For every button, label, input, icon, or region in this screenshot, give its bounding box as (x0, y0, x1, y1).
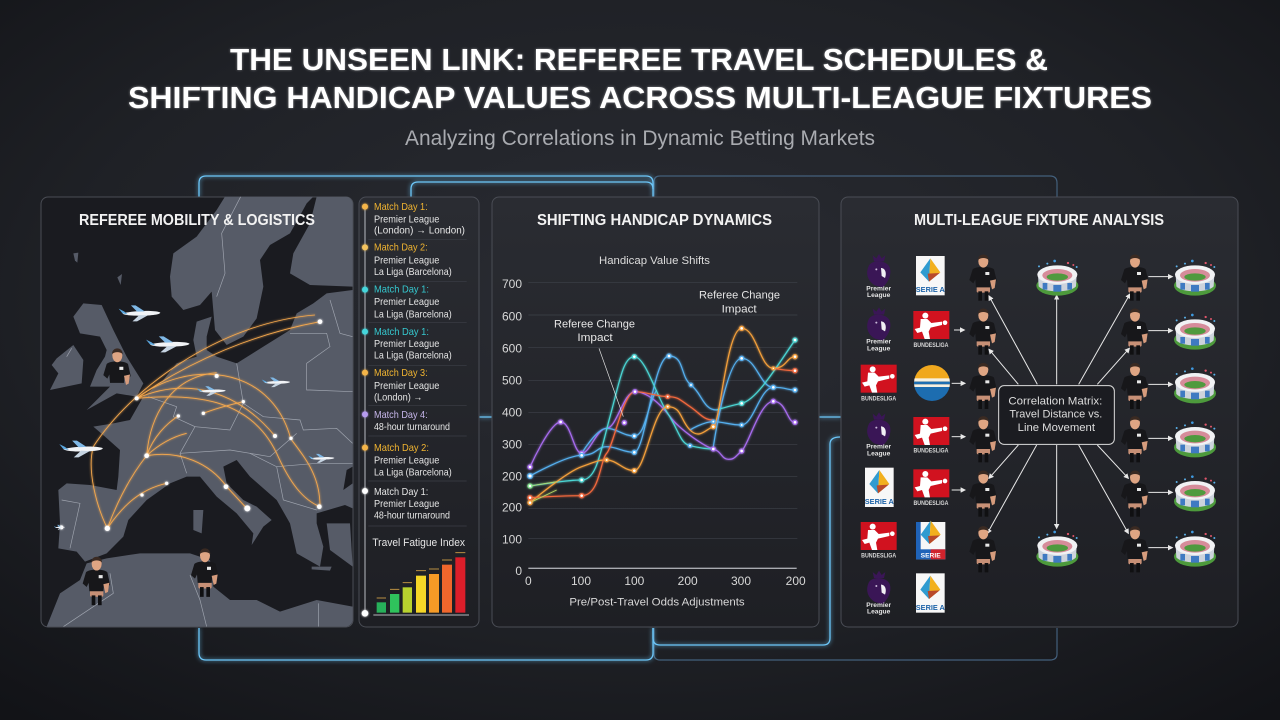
callout: correlation matrix (999, 386, 1114, 444)
callout: correlation matrix: Correlation Matrix: (1008, 395, 1102, 407)
panel: multi-league fixture analysis (841, 197, 1238, 627)
line chart: handicap value shifts: Referee Change (699, 289, 780, 301)
league logos: League (867, 609, 891, 616)
title: THE UNSEEN LINK: REFEREE TRAVEL SCHEDULES & (230, 42, 1048, 77)
panel: referee mobility and logistics (41, 197, 353, 627)
bar chart: travel fatigue (373, 553, 469, 615)
title (128, 42, 1152, 115)
heading: referee mobility: REFEREE MOBILITY & LOGISTICS (79, 212, 315, 229)
league logos (861, 254, 951, 616)
heading: travel fatigue index: Travel Fatigue Index (372, 537, 465, 549)
timeline entries: Premier League (374, 214, 440, 225)
line chart: handicap value shifts (502, 255, 806, 609)
subtitle: Analyzing Correlations in Dynamic Betting Markets (405, 127, 875, 150)
icon: stadiums (1036, 260, 1216, 567)
callout: correlation matrix: Line Movement (1018, 422, 1096, 434)
timeline entries: Premier League (374, 297, 440, 308)
league logos: Premier (866, 339, 891, 346)
league logos: Premier (866, 602, 891, 609)
icon: referees on map (83, 348, 218, 605)
title: SHIFTING HANDICAP VALUES ACROSS MULTI-LEAGUE FIXTURES (128, 80, 1152, 115)
timeline entries: La Liga (Barcelona) (374, 467, 452, 478)
line chart: handicap value shifts: 300 (502, 438, 522, 452)
line chart: handicap value shifts: 100 (502, 532, 522, 546)
line chart: handicap value shifts: Impact (577, 332, 613, 344)
timeline entries: Match Day 2: (374, 443, 429, 454)
league logos: SERIE A (916, 603, 946, 612)
timeline entries: Match Day 1: (374, 487, 428, 498)
league logos: BUNDESLIGA (913, 343, 949, 349)
timeline entries: Premier League (374, 455, 440, 466)
line chart: handicap value shifts: 600 (502, 309, 522, 323)
league logos: SERIE A (865, 497, 895, 506)
timeline entries: Match Day 1: (374, 327, 429, 338)
line chart: handicap value shifts: 100 (571, 574, 591, 588)
arrows: connections (952, 277, 1172, 548)
icon: planes (54, 305, 334, 530)
line chart: handicap value shifts: 400 (502, 406, 522, 420)
line chart: handicap value shifts: 0 (525, 574, 532, 588)
league logos: Premier (866, 444, 891, 451)
league logos: League (867, 450, 891, 457)
league logos: BUNDESLIGA (861, 554, 897, 560)
league logos: League (867, 292, 891, 299)
timeline entries (374, 202, 465, 522)
timeline entries: Match Day 2: (374, 243, 428, 254)
league logos: League (867, 345, 891, 352)
line chart: handicap value shifts: Pre/Post-Travel Odds Adjustments (569, 597, 745, 609)
callout: correlation matrix: Travel Distance vs. (1009, 409, 1102, 421)
line chart: handicap value shifts: 600 (502, 341, 522, 355)
line chart: handicap value shifts: Impact (722, 303, 757, 315)
panel: match day timeline (359, 197, 479, 627)
timeline entries: 48-hour turnaround (374, 422, 450, 433)
timeline entries: Premier League (374, 499, 440, 510)
timeline entries: Premier League (374, 339, 440, 350)
timeline entries: Match Day 1: (374, 202, 428, 213)
league logos: BUNDESLIGA (913, 449, 949, 455)
timeline entries: Premier League (374, 255, 440, 266)
line chart: handicap value shifts: 0 (515, 564, 522, 578)
panel: shifting handicap dynamics (492, 197, 819, 627)
timeline entries: Match Day 4: (374, 410, 428, 421)
line chart: handicap value shifts: 300 (731, 574, 751, 588)
line chart: handicap value shifts: 700 (502, 277, 522, 291)
timeline entries: La Liga (Barcelona) (374, 267, 452, 278)
timeline entries: (London) → (374, 393, 423, 404)
line chart: handicap value shifts: Handicap Value Shifts (599, 255, 711, 267)
heading: shifting handicap: SHIFTING HANDICAP DYNAMICS (537, 212, 772, 229)
league logos: SERIE A (916, 285, 946, 294)
timeline entries: La Liga (Barcelona) (374, 351, 452, 362)
line chart: handicap value shifts: 200 (502, 501, 522, 515)
line chart: handicap value shifts: Referee Change (554, 318, 635, 330)
timeline entries: Premier League (374, 381, 440, 392)
timeline entries: La Liga (Barcelona) (374, 309, 452, 320)
timeline entries: Match Day 1: (374, 285, 429, 296)
icon: referees (969, 254, 1148, 572)
league logos: Premier (866, 285, 891, 292)
line chart: handicap value shifts: 200 (502, 469, 522, 483)
league logos: SERIE (921, 552, 941, 559)
line chart: handicap value shifts: 500 (502, 374, 522, 388)
timeline entries: 48-hour turnaround (374, 511, 450, 522)
connector lines between panels (199, 176, 1057, 660)
league logos: BUNDESLIGA (913, 501, 949, 507)
timeline entries: (London) → London) (374, 226, 465, 237)
timeline dots (362, 204, 368, 617)
line chart: handicap value shifts: 100 (624, 574, 645, 588)
timeline entries: Match Day 3: (374, 368, 428, 379)
map of Europe with flight routes (47, 197, 353, 627)
timeline rail (363, 207, 366, 613)
league logos: BUNDESLIGA (861, 396, 897, 402)
line chart: handicap value shifts: 200 (678, 574, 698, 588)
line chart: handicap value shifts: 200 (786, 574, 806, 588)
heading: multi-league: MULTI-LEAGUE FIXTURE ANALYSIS (914, 212, 1164, 229)
